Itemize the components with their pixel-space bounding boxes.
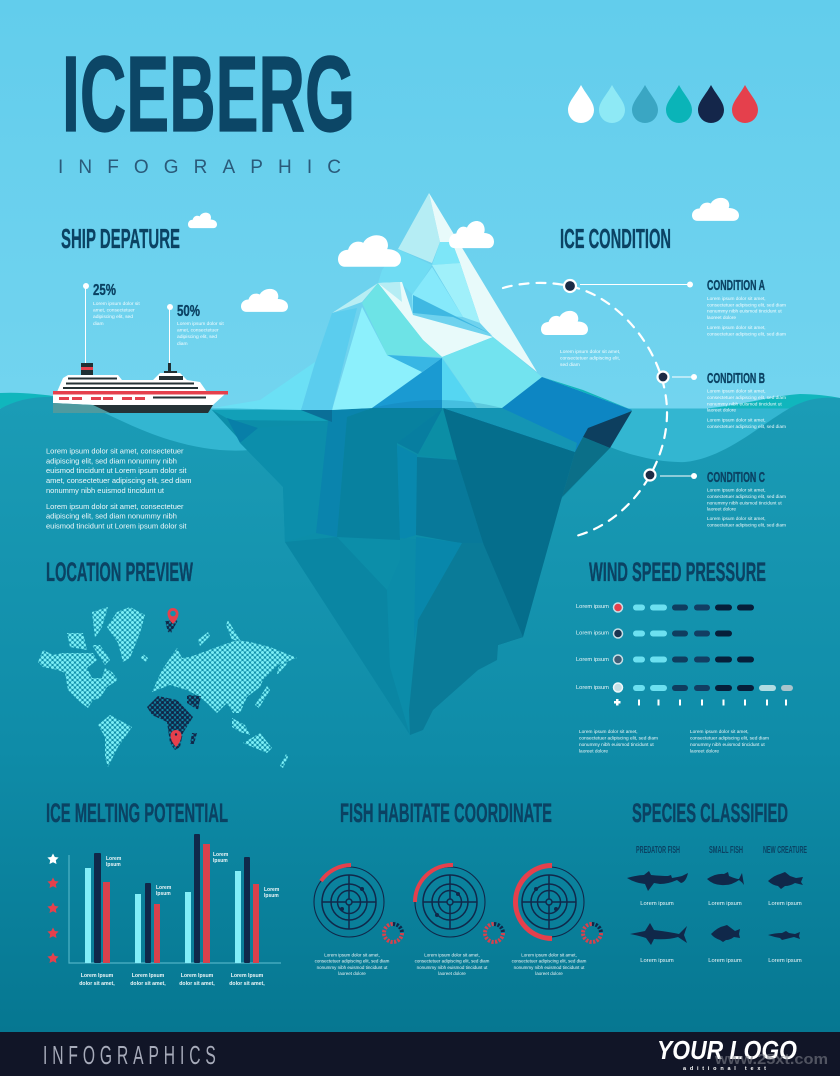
chart axis labels: dolor sit amet, xyxy=(79,981,115,987)
radar 3 xyxy=(512,866,601,976)
chart axes xyxy=(69,855,281,963)
title: ICEBERG xyxy=(62,33,355,154)
logo: YOUR LOGO xyxy=(657,1035,797,1065)
species column headers xyxy=(636,844,807,856)
map pin: south xyxy=(170,730,182,747)
map: light continents xyxy=(38,607,297,768)
heading: ice condition: ICE CONDITION xyxy=(560,223,671,254)
callout: 25%: amet, consectetuer xyxy=(93,308,135,314)
chart axis labels: dolor sit amet, xyxy=(179,981,215,987)
callout: 50%: amet, consectetuer xyxy=(177,328,219,334)
species labels: Lorem ipsum xyxy=(640,958,674,964)
species grid xyxy=(627,844,807,964)
clouds xyxy=(188,198,739,335)
heading: fish habitate coordinate: FISH HABITATE COORDINATE xyxy=(340,798,552,828)
radar 2: nonummy nibh euismod tincidunt ut xyxy=(417,965,488,970)
wind row 1: Lorem ipsum xyxy=(576,604,609,610)
callout: 50%: diam xyxy=(177,341,188,347)
species labels: Lorem ipsum xyxy=(768,958,802,964)
radar 1: laoreet dolore xyxy=(338,971,366,976)
fish icon: tuna xyxy=(707,872,744,885)
callout: 25% xyxy=(83,282,140,363)
heading: ship depature: SHIP DEPATURE xyxy=(61,223,180,254)
map pin: north xyxy=(168,608,178,624)
bar group 2: Ipsum xyxy=(156,891,171,897)
dotted world map xyxy=(38,607,297,768)
waves and sea background xyxy=(0,393,840,1032)
species column headers: SMALL FISH xyxy=(709,844,743,856)
heading: ice melting potential: ICE MELTING POTENTIAL xyxy=(46,798,228,828)
callout: 25%: 25% xyxy=(93,282,116,299)
wind row 2: Lorem ipsum xyxy=(576,630,609,636)
condition B: CONDITION B xyxy=(707,370,765,387)
radar 1: nonummy nibh euismod tincidunt ut xyxy=(317,965,388,970)
callout: 50% xyxy=(167,303,224,363)
bar group 3: Lorem xyxy=(213,852,229,858)
wind row 3 xyxy=(576,655,754,664)
bar group 1: Lorem xyxy=(106,856,122,862)
wind text right: laoreet dolore xyxy=(690,748,719,754)
radar 1: consectetuer adipiscing elit, sed diam xyxy=(315,958,390,964)
wind text left: laoreet dolore xyxy=(579,748,608,754)
condition C: laoreet dolore xyxy=(707,506,736,512)
radar 2 spinner xyxy=(485,924,503,942)
condition A: Lorem ipsum dolor sit amet, xyxy=(707,296,766,302)
callout: 25%: adipiscing elit, sed xyxy=(93,314,133,320)
wind speed chart xyxy=(576,603,793,706)
wind text right: nonummy nibh euismod tincidunt ut xyxy=(690,742,765,748)
condition B: Lorem ipsum dolor sit amet, xyxy=(707,388,766,394)
fish icon: marlin xyxy=(630,923,687,945)
fish icon: perch xyxy=(768,872,803,889)
condition A: nonummy nibh euismod tincidunt ut xyxy=(707,308,782,314)
radar 3: nonummy nibh euismod tincidunt ut xyxy=(514,965,585,970)
wind row 1 xyxy=(576,603,754,612)
condition A: consectetuer adipiscing elit, sed diam xyxy=(707,332,786,338)
callout: 25%: Lorem ipsum dolor sit xyxy=(93,301,140,307)
bar group 3: Ipsum xyxy=(213,858,228,864)
footer band xyxy=(0,1032,840,1076)
colour drops legend xyxy=(568,85,758,123)
bar group 1 xyxy=(85,853,122,963)
map: highlighted dark regions xyxy=(147,620,201,750)
radar 3: consectetuer adipiscing elit, sed diam xyxy=(512,958,587,964)
sky background xyxy=(0,0,840,410)
subtitle: INFOGRAPHIC xyxy=(58,157,341,178)
ship description text: amet, consectetuer adipiscing elit, sed diam xyxy=(46,476,192,485)
radar 1 spinner xyxy=(384,924,402,942)
wind scale ticks xyxy=(614,699,787,706)
species labels: Lorem ipsum xyxy=(708,958,742,964)
radar 3: Lorem ipsum dolor sit amet, xyxy=(521,952,577,958)
callout: 50%: Lorem ipsum dolor sit xyxy=(177,321,224,327)
watermark: www.25xt.com xyxy=(714,1051,828,1068)
chart stars xyxy=(47,854,59,963)
chart axis labels xyxy=(79,973,265,987)
bar group 2: Lorem xyxy=(156,885,172,891)
bar group 1: Ipsum xyxy=(106,862,121,868)
condition A xyxy=(564,277,786,338)
radar 3 spinner xyxy=(583,924,601,942)
ship description text: nonummy nibh euismod tincidunt ut xyxy=(46,486,165,495)
condition B: consectetuer adipiscing elit, sed diam xyxy=(707,395,786,401)
radar 2: Lorem ipsum dolor sit amet, xyxy=(424,952,480,958)
radar 2: consectetuer adipiscing elit, sed diam xyxy=(415,958,490,964)
chart axis labels: Lorem Ipsum xyxy=(81,973,114,979)
wind row 2 xyxy=(576,629,732,638)
callout: 25%: diam xyxy=(93,321,104,327)
bar group 4: Ipsum xyxy=(264,893,279,899)
condition A: laoreet dolore xyxy=(707,315,736,321)
fish icon: pike xyxy=(768,931,800,940)
logo: aditional text xyxy=(683,1066,766,1072)
condition C xyxy=(644,469,786,528)
wind row 3: Lorem ipsum xyxy=(576,657,609,663)
ship description text: adipiscing elit, sed diam nonummy nibh xyxy=(46,512,177,520)
condition B: consectetuer adipiscing elit, sed diam xyxy=(707,424,786,430)
wind row 4 xyxy=(576,683,793,692)
ship description text: Lorem ipsum dolor sit amet, consectetuer xyxy=(46,446,184,456)
condition B: nonummy nibh euismod tincidunt ut xyxy=(707,402,782,408)
fish icon: shark xyxy=(627,871,688,891)
ship description text: euismod tincidunt ut Lorem ipsum dolor sit xyxy=(46,522,187,530)
chart axis labels: Lorem Ipsum xyxy=(231,973,264,979)
condition B: Lorem ipsum dolor sit amet, xyxy=(707,418,766,424)
chart axis labels: Lorem Ipsum xyxy=(181,973,214,979)
species labels: Lorem ipsum xyxy=(708,901,742,907)
wind text right: consectetuer adipiscing elit, sed diam xyxy=(690,736,769,742)
cruise ship xyxy=(53,363,228,413)
wind text left: Lorem ipsum dolor sit amet, xyxy=(579,729,638,735)
species column headers: PREDATOR FISH xyxy=(636,844,680,856)
ship description text: euismod tincidunt ut Lorem ipsum dolor sit xyxy=(46,466,187,475)
condition A: CONDITION A xyxy=(707,277,765,294)
iceberg: above-water facets xyxy=(213,193,632,497)
ship description text: Lorem ipsum dolor sit amet, consectetuer xyxy=(46,502,184,511)
species labels: Lorem ipsum xyxy=(768,901,802,907)
wind text right: Lorem ipsum dolor sit amet, xyxy=(690,729,749,735)
bar group 4: Lorem xyxy=(264,887,280,893)
wind text left: nonummy nibh euismod tincidunt ut xyxy=(579,742,654,748)
chart axis labels: Lorem Ipsum xyxy=(132,973,165,979)
chart axis labels: dolor sit amet, xyxy=(229,981,265,987)
species labels xyxy=(640,901,802,964)
ship data callouts xyxy=(83,282,224,363)
condition C: nonummy nibh euismod tincidunt ut xyxy=(707,500,782,506)
iceberg note text: sed diam xyxy=(560,362,580,368)
dashed condition arc xyxy=(503,283,667,537)
iceberg note text: Lorem ipsum dolor sit amet, xyxy=(560,349,620,355)
condition B: laoreet dolore xyxy=(707,408,736,414)
callout: 50%: 50% xyxy=(177,303,200,320)
footer text: INFOGRAPHICS xyxy=(43,1041,216,1070)
condition A: Lorem ipsum dolor sit amet, xyxy=(707,325,766,331)
radar 1 xyxy=(314,865,402,976)
wind text left: consectetuer adipiscing elit, sed diam xyxy=(579,736,658,742)
radar 1: Lorem ipsum dolor sit amet, xyxy=(324,952,380,958)
condition C: CONDITION C xyxy=(707,469,765,486)
callout: 50%: adipiscing elit, sed xyxy=(177,334,217,340)
species labels: Lorem ipsum xyxy=(640,901,674,907)
condition C: consectetuer adipiscing elit, sed diam xyxy=(707,494,786,500)
condition A: consectetuer adipiscing elit, sed diam xyxy=(707,302,786,308)
radar 3: laoreet dolore xyxy=(535,971,563,976)
radar 2 xyxy=(415,865,503,976)
ship description text: adipiscing elit, sed diam nonummy nibh xyxy=(46,456,177,466)
radar 2: laoreet dolore xyxy=(438,971,466,976)
bar group 2 xyxy=(135,883,172,963)
condition B xyxy=(658,370,786,430)
bar group 4 xyxy=(235,857,280,963)
heading: location preview: LOCATION PREVIEW xyxy=(46,557,193,587)
condition C: Lorem ipsum dolor sit amet, xyxy=(707,516,766,522)
condition C: Lorem ipsum dolor sit amet, xyxy=(707,488,766,494)
bar chart xyxy=(47,834,281,987)
bar group 3 xyxy=(185,834,229,963)
wind row 4: Lorem ipsum xyxy=(576,685,609,691)
iceberg: underwater mass xyxy=(212,408,632,735)
chart axis labels: dolor sit amet, xyxy=(130,981,166,987)
fish icon: small fish xyxy=(711,925,740,942)
condition C: consectetuer adipiscing elit, sed diam xyxy=(707,522,786,528)
iceberg xyxy=(212,193,632,735)
iceberg note text: consectetuer adipiscing elit, xyxy=(560,356,620,362)
